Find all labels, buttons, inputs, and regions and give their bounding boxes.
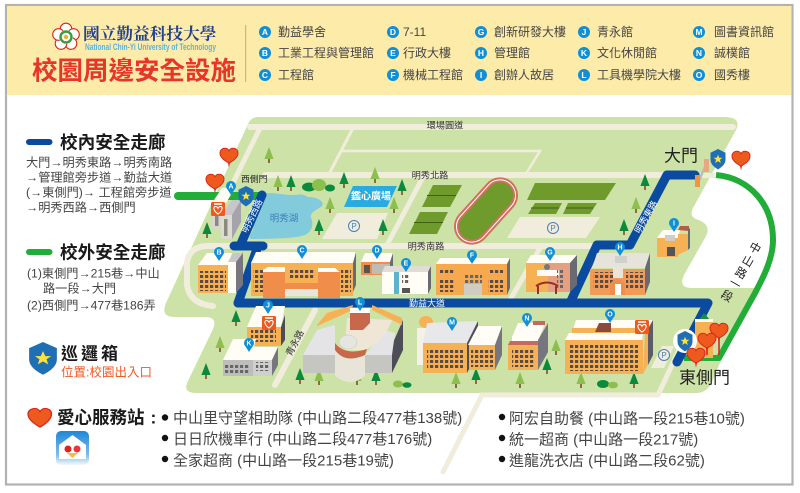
road network	[187, 127, 733, 472]
building legend: 機械工程館	[403, 67, 463, 82]
building L	[303, 305, 403, 382]
map pins: M	[449, 320, 455, 326]
building E	[382, 266, 431, 294]
university logo	[53, 23, 79, 49]
building legend: E	[390, 48, 396, 58]
building legend: 工程館	[278, 67, 314, 82]
route labels: 明秀東路	[632, 198, 659, 235]
building east gate	[695, 313, 713, 358]
building legend: 文化休閒館	[597, 45, 657, 60]
panel: love service stations	[28, 408, 745, 470]
map pins: L	[358, 300, 363, 306]
zhongshan road label: 路	[733, 264, 750, 282]
building legend: 創辦人故居	[494, 67, 554, 82]
map pins: A	[228, 184, 234, 190]
building legend: 工業工程與管理館	[278, 45, 374, 60]
map pins: N	[524, 316, 530, 322]
building C	[251, 252, 356, 298]
trees	[201, 147, 650, 388]
road labels: 環場圓道	[427, 120, 463, 130]
gate labels	[241, 146, 730, 388]
building legend: 圖書資訊館	[714, 24, 774, 39]
building I	[657, 226, 690, 257]
patrol box markers	[238, 149, 726, 353]
building legend: 誠樸館	[714, 45, 750, 60]
building legend: 管理館	[494, 45, 530, 60]
campus map	[164, 117, 773, 472]
road labels: 青永路	[283, 328, 306, 358]
building K	[223, 339, 278, 376]
map pins: C	[299, 248, 305, 254]
plaza	[344, 186, 397, 207]
heart icon	[28, 408, 52, 427]
panel: off-campus safety corridor: 校外安全走廊	[60, 242, 166, 262]
running track	[447, 170, 525, 252]
parking lot west: P	[351, 222, 357, 231]
building legend: K	[581, 48, 588, 58]
building legend: 行政大樓	[403, 45, 451, 60]
map pins: E	[404, 260, 409, 268]
road labels: 明秀北路	[412, 170, 448, 180]
bushes	[302, 179, 618, 388]
building B	[198, 252, 243, 293]
map pins: F	[470, 252, 475, 260]
main gate	[695, 159, 715, 187]
building O	[565, 320, 653, 374]
panel: campus safety corridor: →管理館旁步道→勤益大道	[26, 170, 172, 184]
route labels: 明秀西路	[239, 197, 264, 234]
map pins: H	[617, 244, 623, 252]
building legend: 青永館	[597, 24, 633, 39]
university english name: National Chin-Yi University of Technology	[85, 42, 216, 52]
building legend: 勤益學舍	[278, 24, 326, 39]
building G	[526, 255, 577, 294]
building legend: 國秀樓	[714, 67, 750, 82]
building legend: A	[262, 27, 268, 37]
lake	[250, 193, 323, 239]
route labels: 勤益大道	[409, 298, 445, 308]
stations left column	[162, 410, 462, 470]
map pins: J	[266, 302, 270, 310]
building legend: I	[480, 70, 482, 80]
blue route: campus corridor	[234, 175, 708, 362]
stations right column: 阿宏自助餐 (中山路一段215巷10號)	[509, 410, 745, 428]
zhongshan road label: 段	[719, 287, 736, 305]
building H	[590, 253, 650, 295]
building legend: N	[696, 48, 702, 58]
road labels	[283, 120, 463, 358]
road labels: 明秀南路	[408, 240, 444, 252]
station badge	[56, 431, 89, 465]
building legend: G	[478, 27, 485, 37]
zhongshan road label: 一	[727, 277, 743, 293]
love service station markers	[206, 148, 750, 368]
building D	[361, 253, 393, 275]
building legend: F	[390, 70, 396, 80]
university name: 國立勤益科技大學	[83, 24, 217, 44]
map pins: I	[673, 220, 675, 228]
building legend: J	[582, 27, 587, 37]
map pins	[214, 181, 679, 352]
stations right column: 進龍洗衣店 (中山路二段62號)	[509, 452, 705, 470]
gate labels: 大門	[664, 146, 698, 166]
panel: patrol box legend	[29, 342, 152, 380]
building legend	[259, 24, 774, 82]
parking lot north east: P	[550, 224, 556, 233]
panel: off-campus safety corridor	[26, 242, 166, 312]
building J	[247, 306, 285, 346]
main title: 校園周邊安全設施	[32, 58, 236, 86]
stations left column: 中山里守望相助隊 (中山路二段477巷138號)	[173, 410, 462, 427]
header panel	[7, 6, 792, 95]
building legend: C	[262, 70, 268, 80]
gate labels: 東側門	[679, 368, 730, 388]
map pins: O	[607, 312, 613, 318]
building F	[436, 258, 510, 295]
map ground	[164, 117, 758, 393]
panel: campus safety corridor: (→東側門)→ 工程館旁步道	[26, 184, 172, 200]
panel: campus safety corridor: 校內安全走廊	[60, 132, 166, 152]
parking lot east: P	[661, 351, 667, 360]
building legend: 創新研發大樓	[494, 24, 566, 39]
panel: patrol box legend: 位置:校園出入口	[61, 364, 152, 380]
lake label: 明秀湖	[270, 212, 298, 224]
building legend: 7-11	[403, 25, 426, 39]
panel: off-campus safety corridor: (2)西側門→477巷186弄	[27, 298, 156, 312]
parking lot east	[651, 346, 674, 368]
parking lot north east	[507, 217, 600, 238]
sports courts	[409, 183, 616, 234]
service station heading: :	[150, 408, 156, 428]
building N	[508, 321, 548, 370]
stations left column: 日日欣機車行 (中山路二段477巷176號)	[173, 431, 432, 448]
building A	[211, 188, 241, 239]
panel: patrol box legend: 巡邏箱	[61, 344, 121, 364]
panel: off-campus safety corridor: (1)東側門→215巷→中山	[27, 266, 160, 280]
panel: campus safety corridor: 大門→明秀東路→明秀南路	[26, 154, 172, 170]
map pins: B	[216, 250, 222, 256]
map pins: K	[246, 340, 252, 348]
building legend: B	[262, 48, 268, 58]
building legend: D	[390, 27, 396, 37]
zhongshan road label	[719, 240, 763, 305]
panel: campus safety corridor: →明秀西路→西側門	[26, 200, 136, 214]
stations right column	[499, 410, 745, 470]
stations right column: 統一超商 (中山路一段217號)	[509, 432, 698, 448]
map pins: G	[547, 250, 553, 256]
green route: outside corridor	[178, 175, 773, 358]
building legend: M	[695, 27, 703, 37]
panel: campus safety corridor	[26, 132, 172, 214]
parking lot west	[322, 213, 388, 239]
building M	[417, 316, 502, 373]
panel: off-campus safety corridor: 路一段→大門	[43, 280, 116, 296]
map pins: D	[374, 248, 380, 254]
stations left column: 全家超商 (中山路一段215巷19號)	[173, 452, 394, 470]
gate labels: 西側門	[241, 173, 268, 184]
building legend: L	[581, 70, 587, 80]
building legend: H	[478, 48, 484, 58]
zhongshan road label: 山	[740, 253, 756, 270]
plaza: 鑑心廣場	[351, 190, 391, 202]
building legend: O	[696, 70, 703, 80]
zhongshan road label: 中	[747, 240, 763, 257]
route labels	[239, 197, 659, 308]
service station heading: 愛心服務站	[57, 408, 144, 428]
building legend: 工具機學院大樓	[597, 67, 681, 82]
